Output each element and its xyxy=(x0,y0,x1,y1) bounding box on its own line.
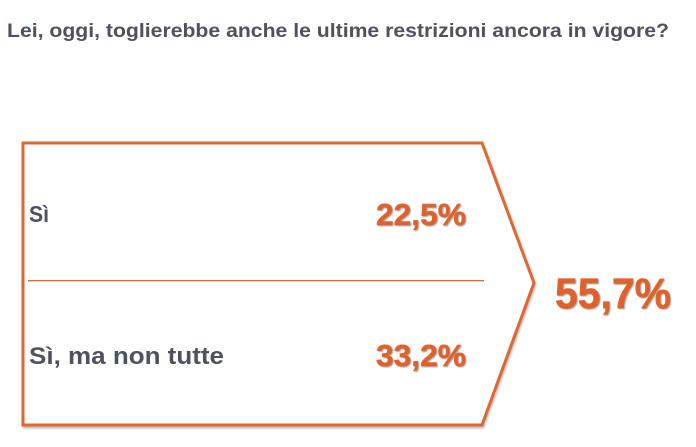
value: 33,2%: 33,2% xyxy=(376,338,466,373)
value: 22,5%: 22,5% xyxy=(376,197,466,232)
title: Lei, oggi, toglierebbe anche le ultime restrizioni ancora in vigore? xyxy=(7,21,669,42)
divider line between rows xyxy=(28,280,484,281)
label: Sì, ma non tutte: Sì, ma non tutte xyxy=(29,343,224,370)
panel: pentagon arrow outline xyxy=(23,143,534,425)
total value: 55,7%: 55,7% xyxy=(555,270,671,318)
label: Sì: Sì xyxy=(29,201,49,227)
